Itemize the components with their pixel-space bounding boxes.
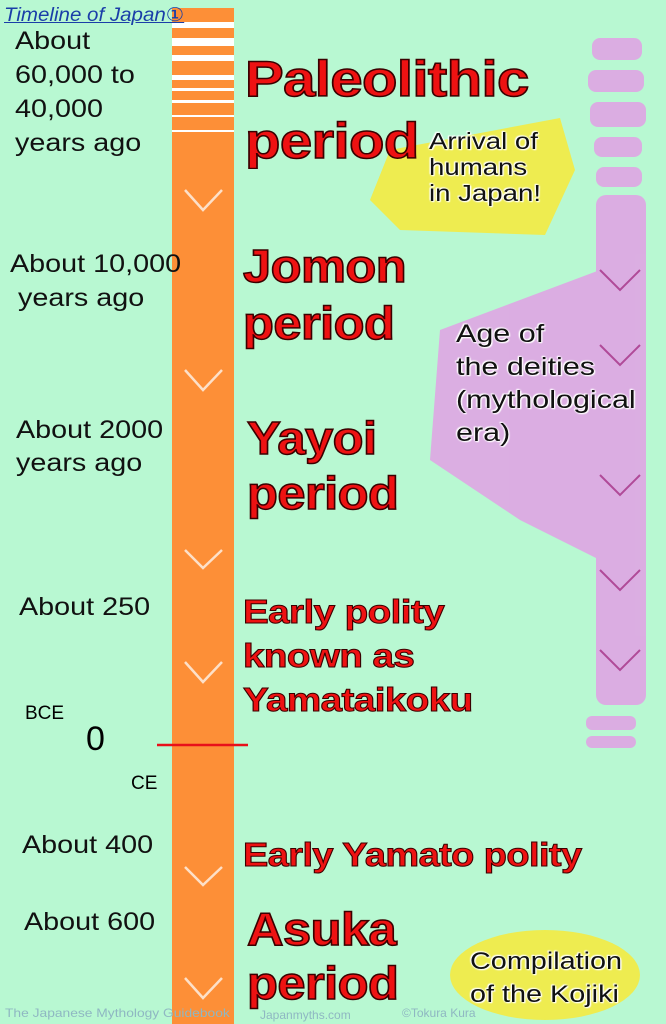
label: jomon dates: years ago [18,284,144,312]
callout: age of deities: era) [456,419,510,447]
period: yamataikoku: Yamataikoku [243,681,473,718]
label: zero: 0 [86,720,105,758]
period: paleolithic: Paleolithic [245,51,529,107]
callout: age of deities [454,320,636,448]
label: yayoi dates: About 2000 [16,416,163,444]
label: jomon dates: About 10,000 [10,250,181,278]
period: yamato: Early Yamato polity [243,836,582,873]
callout: age of deities: the deities [456,353,595,381]
period: jomon: period [243,297,394,349]
period: yamataikoku: known as [243,637,414,674]
callout: kojiki [469,948,622,1009]
period: asuka: period [247,957,398,1009]
label: paleolithic dates: About [15,27,90,55]
label: 250: About 250 [19,593,150,621]
label: 600: About 600 [24,908,155,936]
pink deities band [430,38,646,748]
BCE/CE divider line [157,744,248,746]
period: yamataikoku [242,593,473,718]
orange timeline bar [172,8,234,1024]
period: asuka: Asuka [247,903,396,955]
footer credits [5,1006,476,1022]
footer credits: Japanmyths.com [260,1008,351,1022]
label: paleolithic dates [15,27,141,157]
footer credits: The Japanese Mythology Guidebook [5,1006,230,1020]
period: jomon [242,240,406,350]
period: paleolithic [245,51,529,169]
label: jomon dates [10,250,181,312]
callout: arrival of humans: Arrival of [429,128,538,154]
label: paleolithic dates: 40,000 [15,95,103,123]
title: Timeline of Japan① [4,5,184,26]
period: yayoi: period [247,467,398,519]
label: BCE: BCE [25,703,64,724]
callout: arrival of humans [427,128,541,208]
period: yayoi [246,412,398,520]
period: jomon: Jomon [243,240,406,292]
label: paleolithic dates: years ago [15,129,141,157]
period: yayoi: Yayoi [247,412,376,464]
period: asuka [247,903,398,1010]
label: paleolithic dates: 60,000 to [15,61,135,89]
period: paleolithic: period [245,113,419,169]
label: yayoi dates: years ago [16,449,142,477]
period: yamataikoku: Early polity [243,593,444,630]
footer credits: ©Tokura Kura [402,1006,476,1020]
callout: age of deities: Age of [456,320,544,348]
yellow highlights [370,118,640,1020]
label: yayoi dates [16,416,163,477]
callout: kojiki: Compilation [470,948,622,975]
callout: age of deities: (mythological [456,386,636,414]
callout: kojiki: of the Kojiki [470,981,619,1008]
label: CE: CE [131,773,157,794]
callout: arrival of humans: in Japan! [429,180,541,206]
callout: arrival of humans: humans [429,154,527,180]
label: 400: About 400 [22,831,153,859]
